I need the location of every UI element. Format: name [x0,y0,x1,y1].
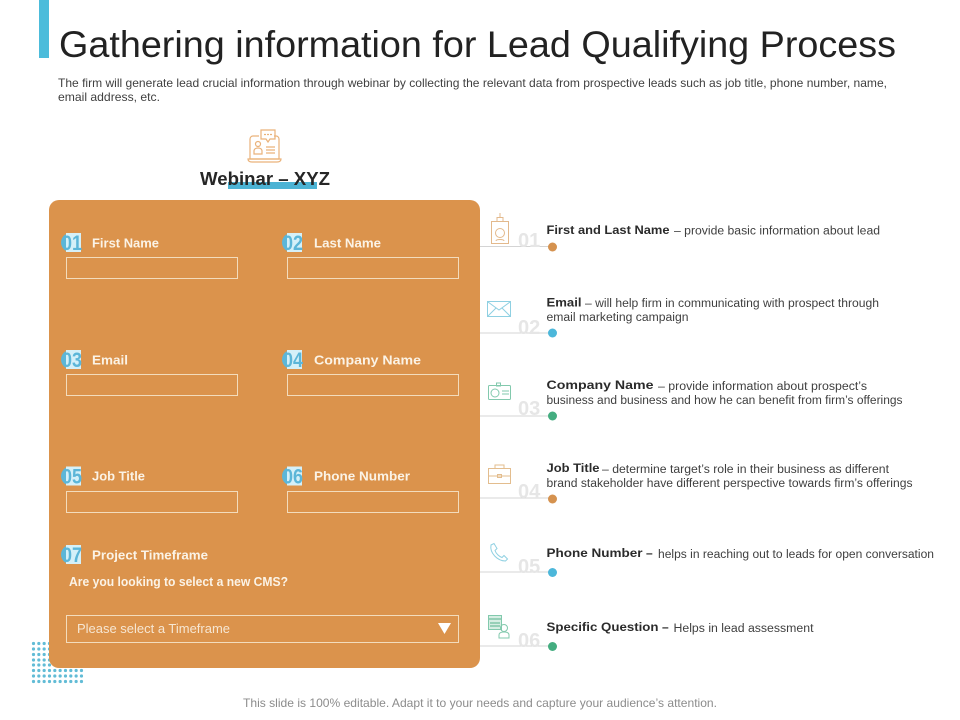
item 1: first and last name: First and Last Name [546,223,670,237]
item 3: company name: – provide information about prospect’s [658,381,867,393]
field: last name: 02 [283,232,303,255]
item 4: job title [480,461,913,504]
item 6: specific question: Helps in lead assessment [674,623,814,635]
intro text: email address, etc. [58,90,160,104]
item 4: job title: Job Title [546,461,600,475]
item 1: first and last name: – provide basic information about lead [674,226,880,238]
item 2: email: email marketing campaign [546,312,688,324]
field: company name: Company Name [314,354,421,368]
item 3: company name: Company Name [546,378,654,392]
intro text [58,76,887,104]
field: phone number: Phone Number [314,470,410,484]
field: project timeframe: Please select a Timeframe [77,622,230,636]
item 1: first and last name [480,213,880,252]
field: company name: 04 [283,349,303,372]
field: email: 03 [62,349,82,372]
item 3: company name: business and business and how he can benefit from firm’s offerings [546,395,903,407]
field: job title: Job Title [92,470,145,484]
item 2: email: 02 [518,317,540,339]
icon: calculator and person [488,616,509,638]
item 4: job title: 04 [518,481,541,503]
item 2: email: Email [546,296,582,310]
icon: phone [491,544,508,561]
field: first name: 01 [62,232,82,255]
item 5: phone number: helps in reaching out to leads for open conversation [658,549,934,561]
panel background [49,200,480,668]
icon: company id card [488,383,510,400]
field: email [61,349,238,396]
icon: webinar laptop [248,130,281,162]
item 3: company name: 03 [518,398,540,420]
item 3: company name [480,378,903,420]
icon: briefcase [488,465,510,484]
icon: envelope [488,302,510,316]
field: phone number [282,466,458,512]
field: job title: 05 [62,466,82,488]
field: project timeframe: Are you looking to select a new CMS? [69,575,288,589]
field: phone number: 06 [283,466,303,488]
field: first name: First Name [92,236,159,250]
title: Gathering information for Lead Qualifying Process [59,24,896,65]
field: job title [61,466,238,512]
field: email: Email [92,354,128,368]
item 4: job title: brand stakeholder have different perspective towards firm’s offerings [546,478,913,490]
field: first name [61,232,238,278]
intro text: The firm will generate lead crucial information through webinar by collecting the relevant data from prospective leads such as job title, phone number, name, [58,76,887,90]
item 5: phone number: 05 [518,556,540,578]
field: project timeframe: Project Timeframe [92,548,208,562]
icon: id badge [492,213,508,244]
field: last name: Last Name [314,236,381,250]
field: project timeframe [61,544,458,642]
panel: form [49,200,480,668]
item 2: email [480,296,879,339]
title accent bar [39,0,49,58]
item 5: phone number: Phone Number [546,546,643,560]
field: last name [282,232,458,278]
item 6: specific question: Specific Question [546,620,658,634]
item 6: specific question: – [662,620,669,634]
field: project timeframe: 07 [62,544,82,567]
field: company name [282,349,458,396]
webinar heading: Webinar – XYZ [200,169,330,189]
item 6: specific question: 06 [518,630,540,652]
footer note: This slide is 100% editable. Adapt it to your needs and capture your audience’s attention. [243,696,717,710]
webinar underline [228,182,317,189]
item 4: job title: – determine target’s role in their business as different [602,464,890,476]
item 1: first and last name: 01 [518,230,540,252]
item 5: phone number: – [646,546,653,560]
decorative dots [34,644,82,682]
item 5: phone number [480,544,934,578]
item 6: specific question [480,616,814,652]
item 2: email: – will help firm in communicating with prospect through [585,298,879,310]
